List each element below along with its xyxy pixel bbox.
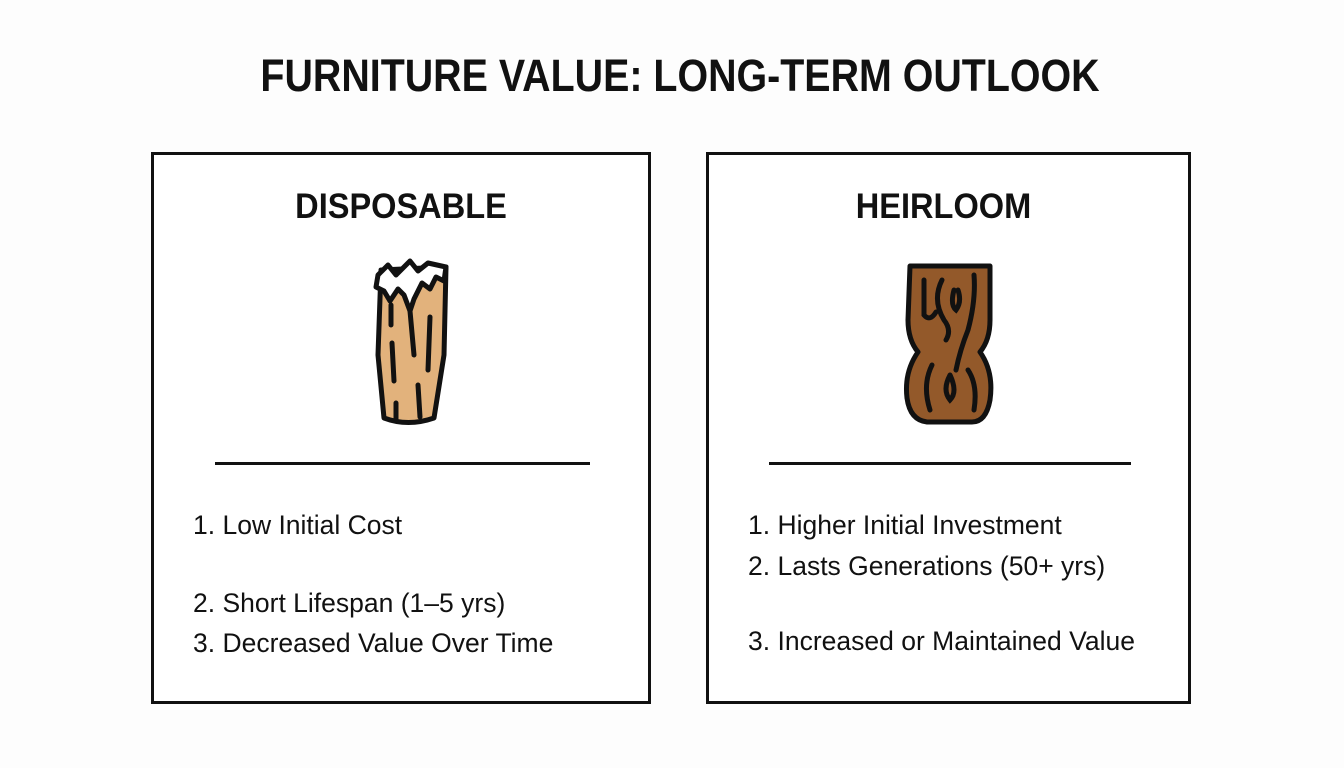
list: disposable: 1. Low Initial Cost (193, 510, 402, 540)
list: disposable: 2. Short Lifespan (1–5 yrs) (193, 588, 505, 618)
list: heirloom: 1. Higher Initial Investment (748, 510, 1062, 540)
list: heirloom: 2. Lasts Generations (50+ yrs) (748, 551, 1105, 581)
title: FURNITURE VALUE: LONG-TERM OUTLOOK (260, 50, 1100, 101)
panel: disposable (151, 152, 651, 704)
heading: disposable: DISPOSABLE (295, 187, 507, 226)
icon: solid wood block (904, 264, 994, 424)
divider (769, 462, 1131, 465)
list: disposable (193, 510, 553, 658)
list: disposable: 3. Decreased Value Over Time (193, 628, 553, 658)
icon: broken wood stick (374, 258, 448, 425)
divider (215, 462, 590, 465)
list: heirloom (748, 510, 1135, 656)
heading: heirloom: HEIRLOOM (856, 187, 1031, 226)
list: heirloom: 3. Increased or Maintained Value (748, 626, 1135, 656)
panel: heirloom (706, 152, 1191, 704)
